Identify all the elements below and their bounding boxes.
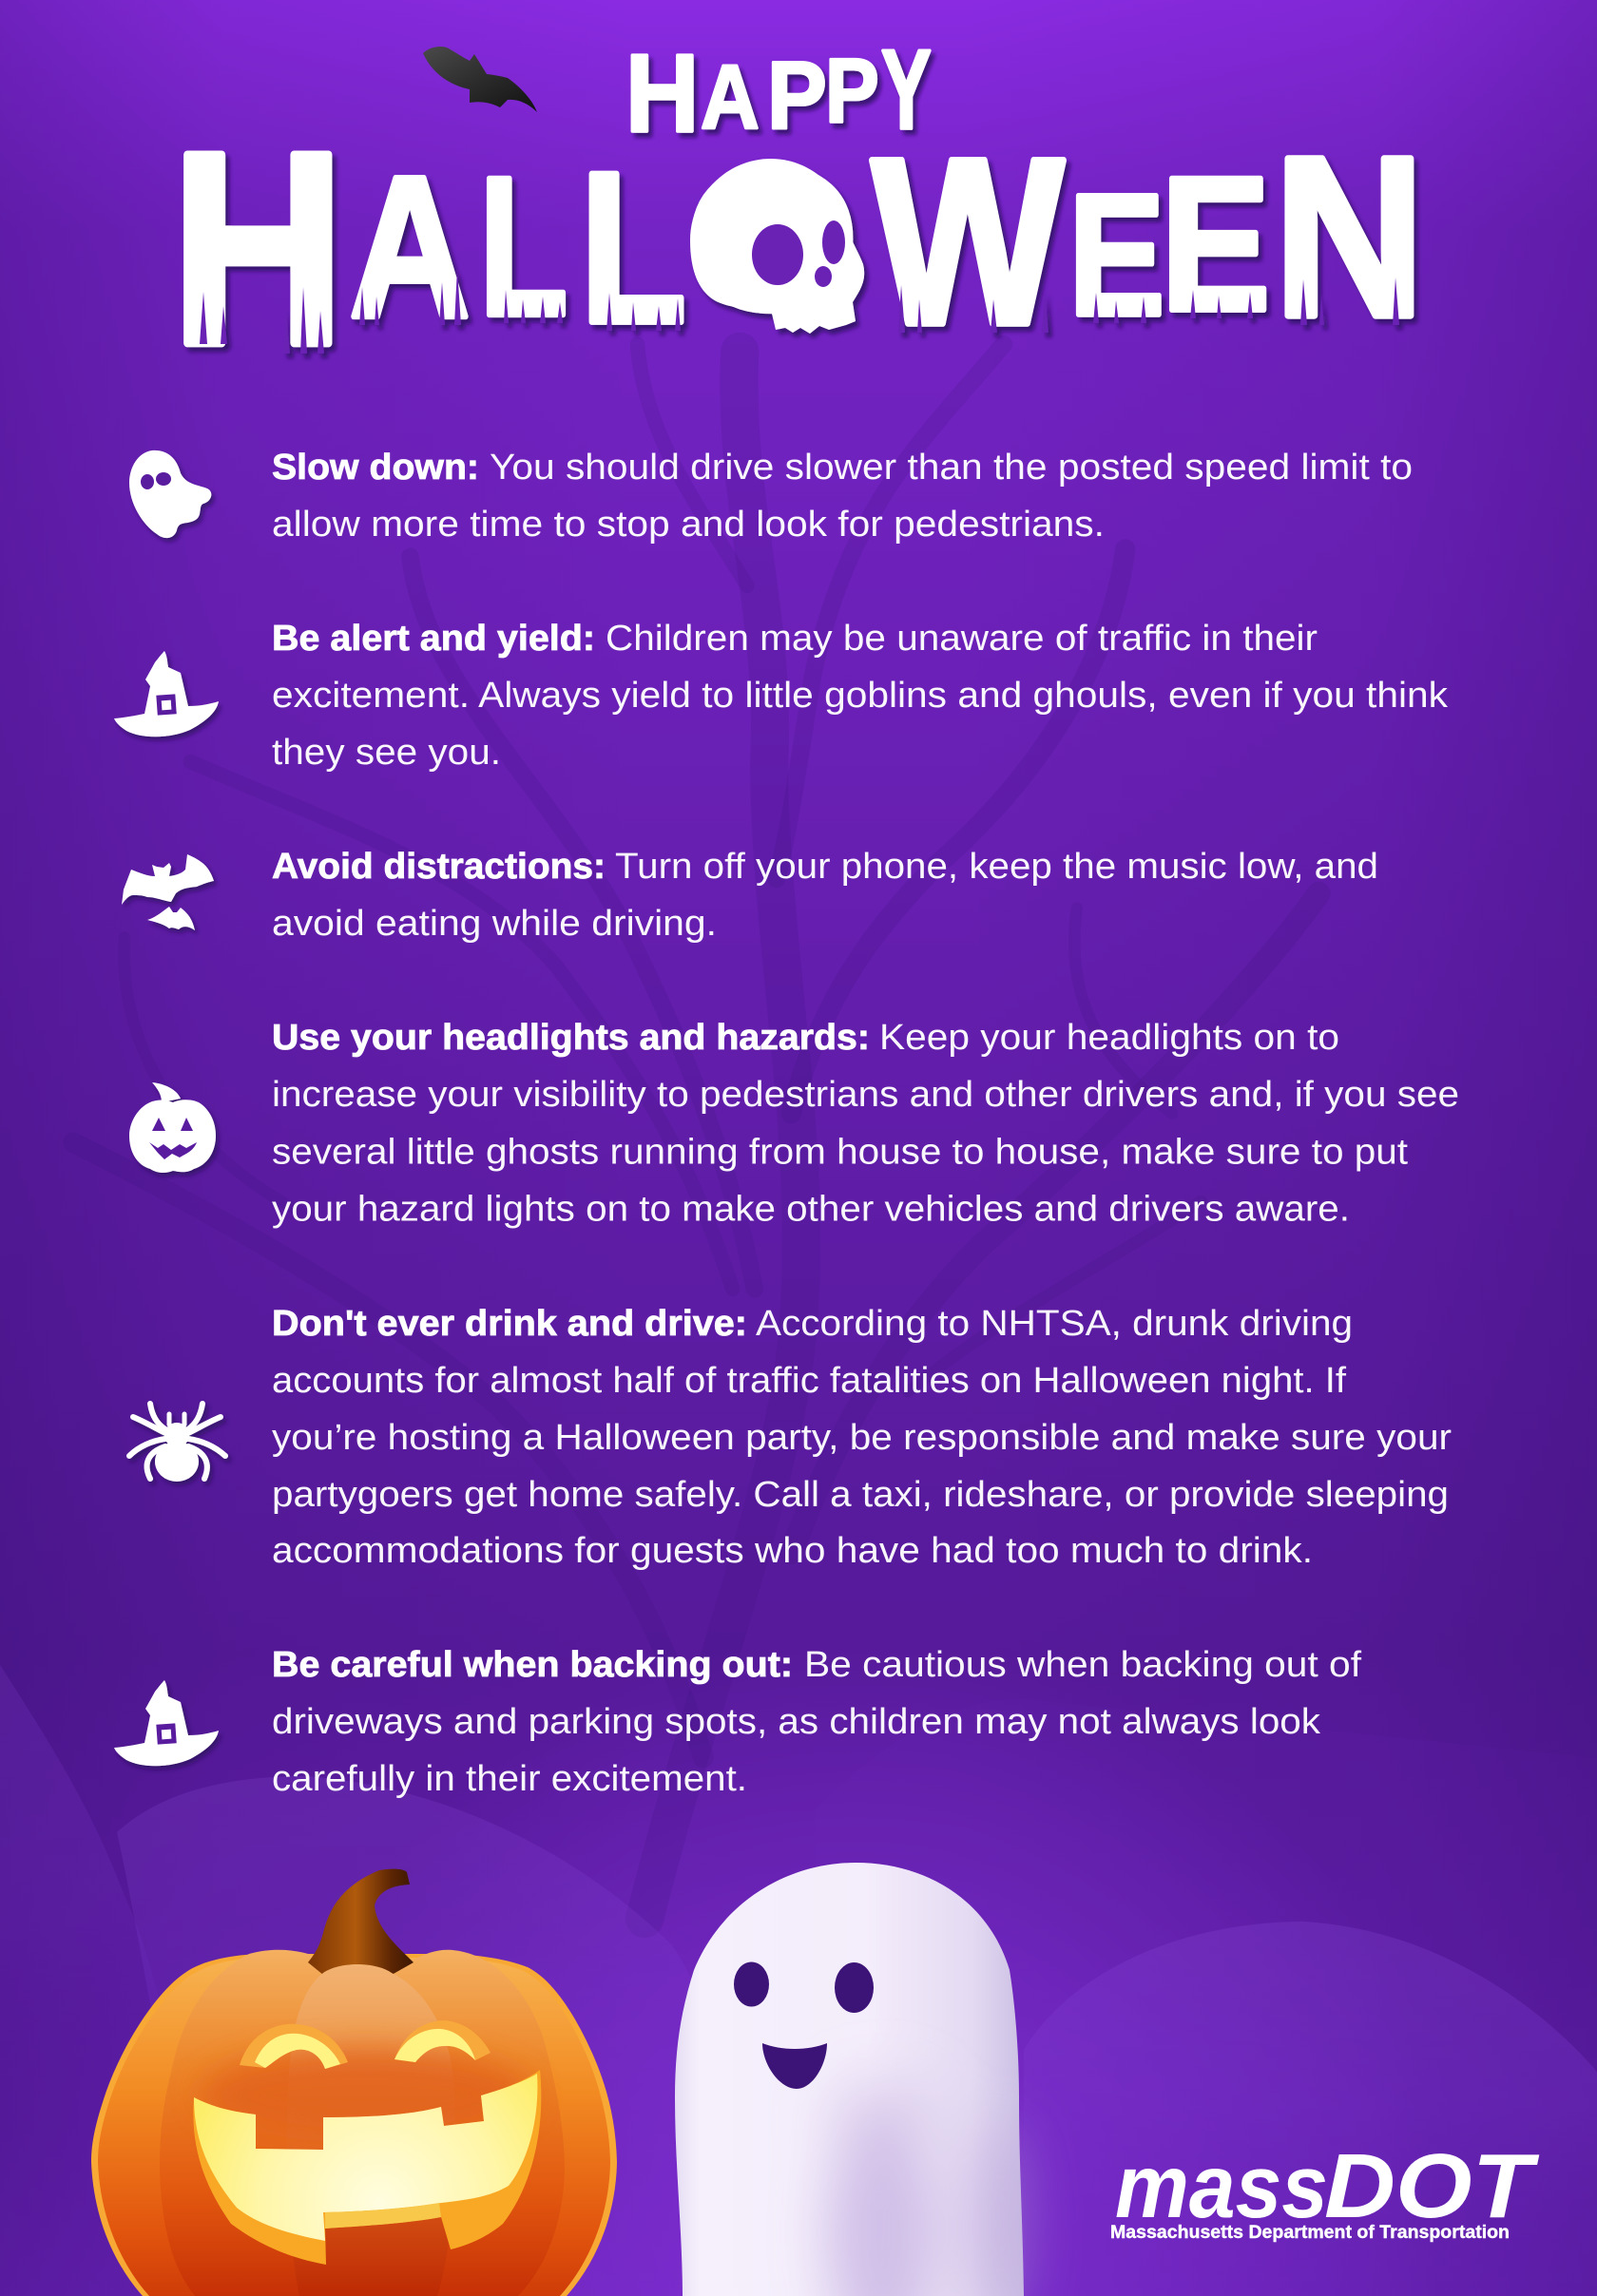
text: slow down: allow more time to stop and look for pedestrians. <box>272 505 1105 545</box>
text: don't drink and drive <box>272 1304 1452 1571</box>
title line: HALLOWEEN: A <box>350 136 471 360</box>
tip 3: avoid distractions <box>122 847 1378 944</box>
title line: HAPPY: P <box>825 40 879 142</box>
logo: massDOT <box>1110 2135 1540 2243</box>
ghost eye right <box>835 1962 874 2013</box>
text: be alert and yield: they see you. <box>272 733 501 773</box>
text: be alert and yield <box>272 619 1449 773</box>
icon: black bat <box>423 47 537 112</box>
tip 1: slow down <box>129 448 1413 545</box>
text: slow down: You should drive slower than the posted speed limit to <box>490 448 1413 488</box>
illustration: ghost <box>675 1863 1027 2296</box>
title line: HAPPY: Y <box>881 28 932 153</box>
text: be alert and yield: excitement. Always yield to little goblins and ghouls, even if you think <box>272 676 1449 716</box>
icon: ghost <box>129 450 211 538</box>
tip 2: be alert and yield <box>114 619 1449 773</box>
icon: jack-o-lantern <box>129 1082 216 1173</box>
background: hills <box>0 1665 1597 2296</box>
text: don't drink and drive: According to NHTSA, drunk driving <box>756 1304 1353 1344</box>
title: Happy Halloween <box>171 28 1425 402</box>
text: backing out: Be careful when backing out: <box>272 1645 793 1685</box>
icon: witch hat <box>114 1680 219 1766</box>
pumpkin face glow <box>200 2048 532 2143</box>
title line: HAPPY <box>625 28 932 155</box>
illustration: pumpkin <box>91 1869 617 2296</box>
logo: massDOT: DOT <box>1324 2135 1540 2237</box>
title line: HALLOWEEN <box>171 97 1425 402</box>
text: don't drink and drive: you’re hosting a Halloween party, be responsible and make sure your <box>272 1418 1452 1458</box>
title line: HALLOWEEN: E <box>1161 137 1270 351</box>
title line: HAPPY: H <box>625 31 699 155</box>
tip 6: backing out <box>114 1645 1361 1799</box>
background: bare tree silhouette <box>73 344 1318 1919</box>
tip 5: don't drink and drive <box>129 1304 1452 1571</box>
title line: HALLOWEEN: E <box>1068 158 1164 352</box>
icon: witch hat <box>114 651 219 737</box>
text: backing out: carefully in their excitement. <box>272 1759 747 1799</box>
text: slow down <box>272 448 1413 545</box>
title line: HAPPY: P <box>767 42 827 149</box>
text: avoid distractions: Turn off your phone, keep the music low, and <box>615 847 1378 887</box>
title line: HALLOWEEN: H <box>171 97 345 402</box>
tip 4: headlights and hazards <box>129 1018 1459 1230</box>
text: avoid distractions: Avoid distractions: <box>272 847 606 887</box>
title line: HALLOWEEN: L <box>580 126 686 368</box>
text: headlights and hazards: Keep your headlights on to <box>879 1018 1339 1058</box>
ghost mouth <box>762 2043 827 2089</box>
text: don't drink and drive: accounts for almost half of traffic fatalities on Halloween night. If <box>272 1361 1346 1401</box>
text: headlights and hazards: increase your visibility to pedestrians and other drivers and, if you see <box>272 1075 1459 1115</box>
pumpkin body <box>91 1954 617 2296</box>
text: don't drink and drive: accommodations for guests who have had too much to drink. <box>272 1531 1313 1571</box>
ghost body <box>675 1863 1024 2296</box>
text: backing out: driveways and parking spots, as children may not always look <box>272 1702 1321 1742</box>
ghost folds <box>827 2076 1027 2296</box>
icon: bats <box>122 854 214 930</box>
logo: massDOT: mass <box>1115 2136 1328 2237</box>
title line: HALLOWEEN: O <box>685 125 859 353</box>
text: avoid distractions <box>272 847 1378 944</box>
pumpkin mouth <box>193 2070 541 2265</box>
text: headlights and hazards <box>272 1018 1459 1230</box>
icon: spider <box>129 1404 225 1482</box>
pumpkin left eye <box>240 2024 348 2069</box>
text: headlights and hazards: your hazard lights on to make other vehicles and drivers aware. <box>272 1190 1350 1230</box>
logo: massDOT: Massachusetts Department of Transportation <box>1110 2223 1510 2243</box>
title line: HAPPY: A <box>701 47 760 148</box>
pumpkin stem <box>308 1869 414 1975</box>
text: be alert and yield: Be alert and yield: <box>272 619 595 659</box>
text: be alert and yield: Children may be unaware of traffic in their <box>606 619 1318 659</box>
text: don't drink and drive: partygoers get home safely. Call a taxi, rideshare, or provide sleeping <box>272 1475 1449 1515</box>
title line: HALLOWEEN: L <box>479 136 568 356</box>
text: don't drink and drive: Don't ever drink and drive: <box>272 1304 747 1344</box>
text: avoid distractions: avoid eating while driving. <box>272 904 717 944</box>
title line: HALLOWEEN: W <box>872 110 1064 374</box>
text: headlights and hazards: several little ghosts running from house to house, make sure to put <box>272 1133 1408 1173</box>
icon: skull forming the O <box>690 159 864 334</box>
text: backing out: Be cautious when backing out of <box>804 1645 1361 1685</box>
text: headlights and hazards: Use your headlights and hazards: <box>272 1018 870 1058</box>
title line: HALLOWEEN: N <box>1274 109 1425 364</box>
title drips <box>200 268 1399 354</box>
text: backing out <box>272 1645 1361 1799</box>
text: slow down: Slow down: <box>272 448 479 488</box>
pumpkin right eye <box>394 2020 491 2062</box>
ghost eye left <box>734 1961 769 2007</box>
